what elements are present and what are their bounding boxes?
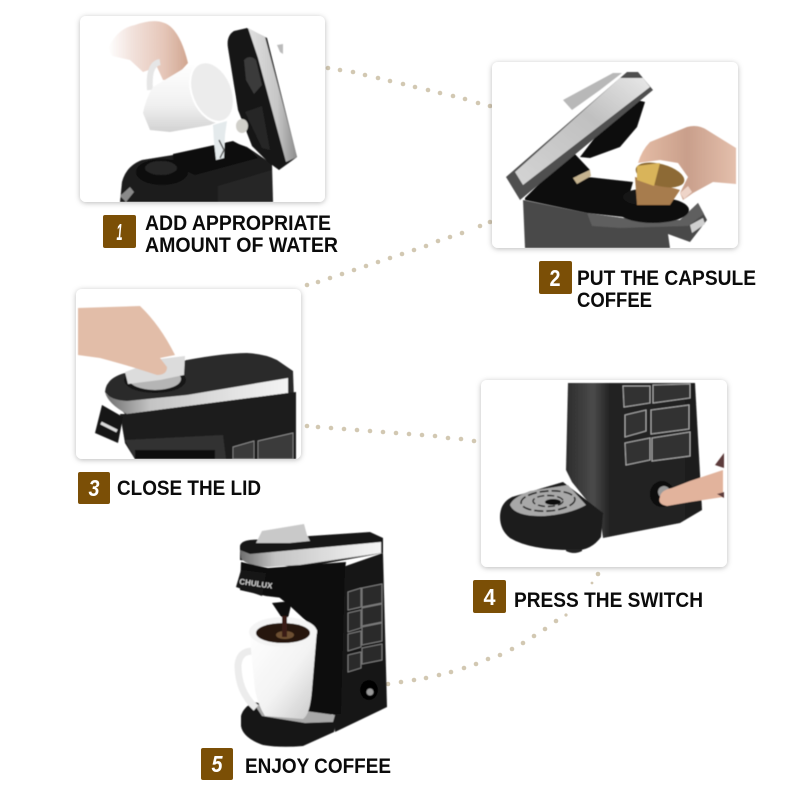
power switch xyxy=(360,680,378,700)
hand xyxy=(638,126,736,200)
badge: step 2: 2 xyxy=(550,265,560,291)
base xyxy=(241,702,337,747)
badge: step 3 xyxy=(78,472,110,504)
badge: step 3: 3 xyxy=(88,475,100,501)
lid underside xyxy=(580,100,645,158)
brand badge xyxy=(236,570,266,596)
dispenser xyxy=(272,601,292,618)
finger xyxy=(659,470,723,506)
open lid xyxy=(506,72,653,200)
label: step 2: COFFEE xyxy=(577,289,652,312)
badge: step 5 xyxy=(201,748,233,780)
capsule holder xyxy=(617,197,689,223)
white mug xyxy=(143,69,215,132)
open lid xyxy=(228,28,297,170)
lid handle xyxy=(563,73,622,110)
panel: step 4 press switch xyxy=(481,380,727,567)
top cap xyxy=(240,532,383,568)
mug handle xyxy=(238,651,263,708)
panel: step 3 close lid xyxy=(76,289,301,459)
lid knob xyxy=(124,376,186,393)
capsule body xyxy=(635,177,680,205)
logo badge xyxy=(95,405,123,443)
instruction labels xyxy=(623,384,690,465)
label: step 2 xyxy=(577,267,756,312)
panel: step 2 insert capsule xyxy=(492,62,738,248)
panel: step 1 add water xyxy=(80,16,325,202)
head xyxy=(240,562,346,600)
tray base xyxy=(500,482,603,550)
coffee stream xyxy=(282,616,287,637)
badge: step 4 xyxy=(473,580,506,613)
hand xyxy=(78,306,175,375)
label: step 3: CLOSE THE LID xyxy=(117,477,261,500)
machine underside xyxy=(125,435,226,459)
dotted connector: step 4 to step 5 xyxy=(386,572,600,686)
water stream xyxy=(213,121,227,160)
photo: pouring water into machine xyxy=(108,21,297,202)
power switch xyxy=(650,481,674,507)
label: step 4: PRESS THE SWITCH xyxy=(514,589,703,612)
white mug xyxy=(249,630,317,719)
silver strip xyxy=(248,28,297,162)
hinge arm xyxy=(540,154,590,184)
label: step 2: PUT THE CAPSULE xyxy=(577,267,756,290)
machine base xyxy=(120,142,273,202)
machine body xyxy=(566,383,702,538)
lid handle xyxy=(256,524,310,543)
instruction labels xyxy=(348,584,382,672)
label: step 1: ADD APPROPRIATE xyxy=(145,212,331,235)
dotted connector: step 2 to step 3 xyxy=(305,220,492,287)
instruction labels xyxy=(233,433,293,459)
label: step 1 xyxy=(145,212,338,257)
tower xyxy=(333,553,387,732)
silver band xyxy=(240,542,381,567)
water reservoir xyxy=(525,175,633,217)
inner black recess behind mug xyxy=(270,568,345,716)
badge: step 4: 4 xyxy=(484,584,496,610)
product photo: finished coffee machine: CHULUX xyxy=(239,577,274,591)
badge: step 5: 5 xyxy=(212,751,224,777)
dotted connector: step 3 to step 4 xyxy=(305,424,476,443)
hand xyxy=(108,21,188,80)
machine base xyxy=(523,200,707,248)
badge: step 2 xyxy=(539,261,572,294)
photo: closing lid xyxy=(78,306,296,459)
label: step 5: ENJOY COFFEE xyxy=(245,755,391,778)
label: step 1: AMOUNT OF WATER xyxy=(145,234,338,257)
silver band xyxy=(105,378,288,414)
photo: pressing switch xyxy=(500,383,724,553)
product photo: finished coffee machine xyxy=(236,524,387,747)
photo: placing capsule xyxy=(506,72,736,248)
badge: step 1: 1 xyxy=(116,219,122,245)
dotted connector: step 1 to step 2 xyxy=(326,66,492,108)
badge: step 1 xyxy=(103,215,136,248)
mug handle xyxy=(150,62,160,90)
machine top xyxy=(105,353,296,459)
silver drip tray xyxy=(510,485,586,516)
silver strip xyxy=(515,78,650,185)
head below band xyxy=(120,392,296,459)
